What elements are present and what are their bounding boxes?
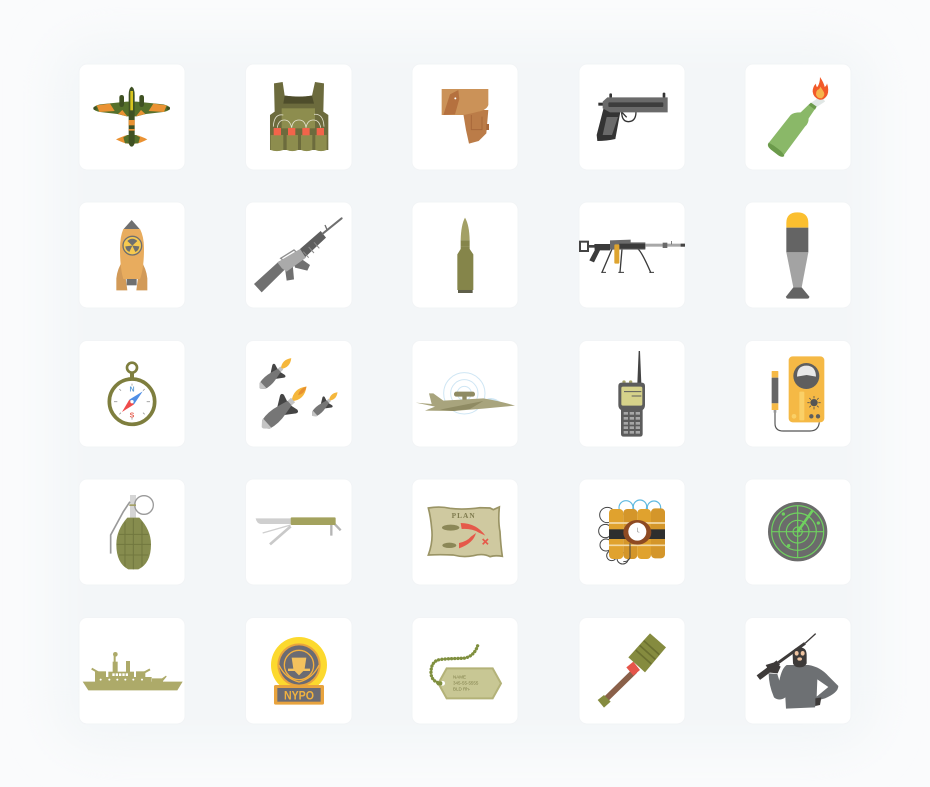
icon: stick grenade: [598, 633, 666, 708]
card: walkie-talkie: [579, 340, 685, 447]
icon: compass: N: [129, 387, 135, 394]
card: tactical vest: [246, 64, 352, 170]
icon: hand grenade: [111, 495, 153, 569]
card: machine gun: [579, 202, 685, 308]
card: bullet: [412, 202, 518, 308]
icon: holster: [442, 89, 489, 144]
icon: molotov cocktail: [768, 77, 828, 157]
icon: tactical vest: [270, 82, 328, 151]
bomb: large: [254, 378, 315, 437]
bomb: small: [308, 387, 343, 421]
icon: compass: [109, 363, 155, 424]
icon: falling bombs: [254, 352, 343, 437]
icon: radar jet: [416, 373, 515, 414]
card: compass: [79, 340, 185, 447]
card: battle plan map: [412, 479, 518, 585]
icon: warship: [83, 652, 183, 690]
card: pistol: [579, 64, 685, 170]
icon: radar screen: [768, 502, 827, 561]
icon: NYPO badge: NYPO: [284, 690, 314, 703]
icon: dog tag: [431, 643, 501, 698]
icon: geiger counter: [772, 356, 824, 431]
card: stick grenade: [579, 618, 685, 724]
card: warship: [79, 618, 185, 724]
icon: battle plan map: PLAN: [452, 511, 476, 520]
icon: pistol: [597, 93, 668, 141]
card: molotov cocktail: [745, 64, 851, 170]
card: masked gunman: [745, 618, 851, 724]
icon: dog tag: NAME: [453, 674, 466, 679]
card: bomber plane: [79, 64, 185, 170]
icon: dog tag: BLD Rh-: [453, 687, 471, 692]
icon: walkie-talkie: [618, 351, 645, 437]
icon: masked gunman: [758, 634, 838, 709]
card: multitool knife: [246, 479, 352, 585]
icon: bomber plane: [93, 87, 170, 147]
icon: nuclear rocket: [116, 220, 147, 290]
icon: bullet: [457, 218, 473, 293]
card: radar screen: [745, 479, 851, 585]
card: hand grenade: [79, 479, 185, 585]
card: holster: [412, 64, 518, 170]
card: falling bombs: [246, 340, 352, 447]
icon: mortar shell: [786, 212, 809, 299]
card: mortar shell: [745, 202, 851, 308]
icon: dog tag: 345-55-5555: [453, 681, 479, 686]
icon: multitool knife: [256, 517, 341, 544]
card: dynamite with clock: [579, 479, 685, 585]
icon: compass: S: [130, 412, 135, 419]
bomb: upper: [254, 352, 298, 395]
icon: dynamite with clock: [599, 500, 665, 564]
card: assault rifle: [246, 202, 352, 308]
icon: machine gun: [580, 240, 685, 272]
card: NYPO badge: [246, 618, 352, 724]
card: dog tag: [412, 618, 518, 724]
icon: assault rifle: [254, 218, 342, 292]
card: nuclear rocket: [79, 202, 185, 308]
card: geiger counter: [745, 340, 851, 447]
card: radar jet: [412, 340, 518, 447]
